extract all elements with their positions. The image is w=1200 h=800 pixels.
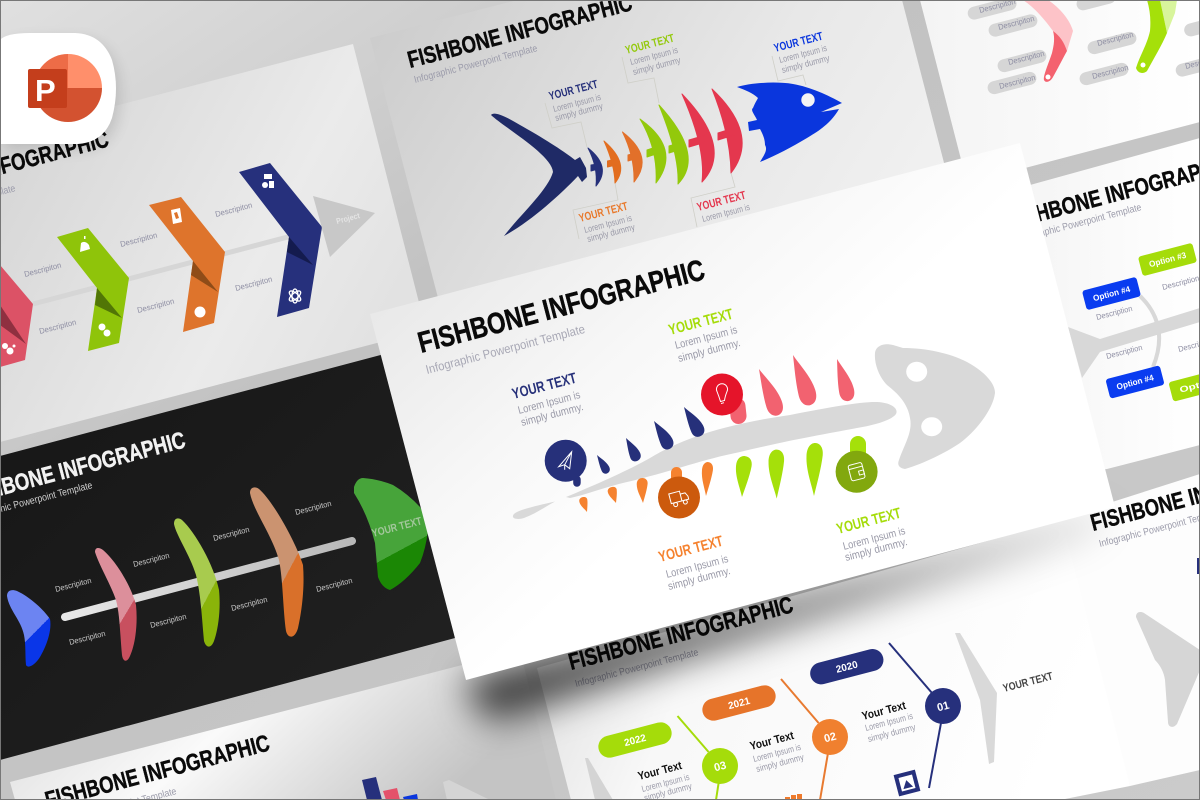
label: orange	[657, 533, 732, 593]
label: green top: simply dummy.	[677, 337, 742, 365]
description labels: Descripiton	[119, 231, 158, 249]
label: green	[624, 33, 682, 77]
label: green bottom: YOUR TEXT	[835, 505, 903, 538]
label: navy: Lorem Ipsum is	[552, 92, 602, 114]
icon: powerpoint badge: P	[35, 73, 56, 108]
text block: 01: simply dummy	[867, 722, 917, 744]
arrow head: project: Project	[335, 211, 361, 226]
label: green: YOUR TEXT	[624, 33, 676, 57]
description labels: Descripiton	[234, 275, 273, 293]
subtitle: Infographic Powerpoint Template	[574, 647, 700, 690]
chevron: green	[57, 228, 129, 351]
pills	[966, 0, 1200, 96]
label: orange: simply dummy	[586, 222, 636, 244]
option: green upper	[1138, 243, 1197, 276]
label: navy: Lorem Ipsum is	[517, 389, 582, 417]
option: green upper: Option #3	[1148, 250, 1187, 269]
fish tail shape	[1136, 612, 1200, 727]
panel: timeline slide	[537, 520, 1130, 800]
ribs: green lower	[733, 436, 866, 499]
panel: dark boomerang slide	[0, 353, 455, 760]
node: 03	[702, 748, 738, 784]
panel: option cards slide	[1005, 138, 1200, 480]
pill labels: Descripiton	[1091, 63, 1129, 81]
bar fragment	[1197, 558, 1200, 574]
description labels: Descripiton	[315, 576, 353, 594]
descriptions: Description	[1095, 304, 1133, 322]
option: blue upper	[1082, 277, 1141, 310]
description labels: Descripiton	[212, 525, 250, 543]
main slide shadow	[462, 507, 1115, 722]
description labels: Descripiton	[230, 595, 268, 613]
boomerang: orange	[250, 487, 304, 637]
option: green lower	[1168, 368, 1200, 402]
ribs: red upper	[729, 352, 856, 425]
label: red	[696, 190, 751, 224]
option: blue lower: Option #4	[1115, 372, 1155, 392]
label: blue: Lorem Ipsum is	[778, 43, 828, 65]
icon: orange fragment	[785, 794, 802, 800]
text block: 03	[637, 760, 693, 800]
icon: powerpoint badge	[0, 33, 120, 150]
label: green bottom: simply dummy.	[844, 536, 909, 564]
label: navy	[548, 79, 604, 123]
year pill: 2020	[808, 647, 886, 687]
node: 01	[925, 688, 961, 724]
label: navy: simply dummy.	[520, 401, 585, 429]
rod	[65, 541, 352, 617]
text block: 03: Your Text	[637, 760, 683, 783]
fish head	[737, 83, 842, 162]
panel: boomerang pills slide	[920, 0, 1200, 175]
label: red: Lorem Ipsum is	[701, 202, 751, 224]
panel: lower right slide	[1040, 452, 1200, 786]
icon: stamp	[894, 770, 920, 796]
option: blue lower	[1105, 365, 1165, 399]
description labels: Descripiton	[54, 576, 92, 594]
text block: 02: simply dummy	[755, 752, 805, 774]
label: orange: Lorem Ipsum is	[665, 553, 730, 581]
boomerang: blue	[7, 590, 50, 667]
label: blue: simply dummy	[780, 53, 831, 75]
chevron: orange	[149, 197, 225, 332]
timeline lines	[678, 643, 941, 800]
pill labels	[978, 0, 1200, 91]
gray tail shape	[955, 633, 997, 764]
chevron: red	[0, 265, 33, 367]
fish skeleton: head	[875, 344, 995, 469]
description labels: Descripiton	[294, 499, 332, 517]
label: your text: YOUR TEXT	[1002, 670, 1054, 695]
ribs: orange lower	[578, 462, 714, 513]
ribs: navy upper	[594, 403, 707, 475]
spine	[33, 228, 322, 304]
text block: 02	[749, 730, 805, 774]
boomerang: pink	[95, 548, 137, 661]
text block: 02: Your Text	[749, 730, 795, 753]
chevron: navy	[239, 163, 322, 317]
year pill: 2022	[596, 720, 674, 760]
pill labels: Descripiton	[1007, 49, 1045, 67]
text block: 01: Your Text	[861, 700, 907, 723]
head: green	[354, 478, 428, 590]
label: green top: YOUR TEXT	[667, 306, 735, 339]
panel: blue fish slide	[370, 0, 1000, 420]
gray fish fragment	[443, 780, 490, 800]
label: navy	[510, 370, 585, 429]
fish tail	[491, 114, 587, 236]
connectors	[545, 56, 806, 239]
description labels: Descripiton	[136, 297, 175, 315]
subtitle: Infographic Powerpoint Template	[1017, 202, 1143, 245]
boomerang: green	[1136, 0, 1177, 73]
text block: 03: Lorem Ipsum is	[640, 772, 691, 794]
node: 02	[812, 719, 848, 755]
fish skeleton: spine	[513, 402, 897, 519]
description labels: Descripiton	[38, 318, 77, 336]
boomerang: lime	[174, 518, 220, 647]
label: orange: simply dummy.	[667, 565, 732, 593]
year pill: 2021	[700, 683, 778, 723]
pill labels: Descripiton	[1096, 30, 1134, 48]
panel: main fishbone slide	[370, 143, 1115, 680]
pill labels: Descripiton	[997, 14, 1035, 32]
label: green: Lorem Ipsum is	[629, 45, 679, 67]
icon: paper plane node	[545, 440, 587, 487]
label: green bottom	[835, 505, 909, 564]
label: navy: YOUR TEXT	[510, 370, 578, 403]
node: 02: 02	[823, 731, 838, 745]
year pill: 2020: 2020	[835, 659, 860, 676]
description labels	[23, 201, 273, 336]
fish ribs	[588, 89, 742, 186]
label: green bottom: Lorem Ipsum is	[842, 525, 907, 553]
head: green: YOUR TEXT	[371, 515, 423, 540]
spine and arc	[1068, 296, 1200, 378]
panel: chevron fishbone slide	[0, 44, 426, 442]
label: green: simply dummy	[632, 55, 682, 77]
description labels: Descripiton	[68, 629, 106, 647]
year pill: 2021: 2021	[727, 696, 752, 712]
icon: light bulb node	[701, 374, 743, 416]
node: 01: 01	[936, 700, 951, 714]
label: navy: simply dummy	[554, 101, 604, 123]
icon: wallet node	[836, 451, 878, 493]
label: blue: YOUR TEXT	[773, 31, 824, 55]
label: orange: YOUR TEXT	[657, 533, 725, 566]
label: orange: YOUR TEXT	[578, 201, 629, 225]
descriptions	[1095, 274, 1200, 361]
boomerang: red	[1023, 0, 1073, 82]
option: blue upper: Option #4	[1092, 284, 1131, 303]
subtitle: Infographic Powerpoint Template	[424, 322, 586, 377]
label: green top	[667, 306, 742, 365]
title: FISHBONE INFOGRAPHIC	[414, 253, 708, 360]
description labels: Descripiton	[132, 551, 170, 569]
subtitle: Infographic Powerpoint Template	[413, 43, 539, 86]
year pill: 2022: 2022	[623, 733, 648, 749]
label: green top: Lorem Ipsum is	[674, 324, 739, 352]
node: 03: 03	[713, 760, 728, 774]
bar chart	[362, 777, 418, 800]
description labels: Descripiton	[149, 612, 187, 630]
label: blue	[773, 31, 831, 75]
description labels: Descripiton	[214, 201, 253, 219]
label: navy: YOUR TEXT	[548, 79, 599, 103]
label: orange	[578, 201, 636, 244]
text block: 02: Lorem Ipsum is	[752, 742, 802, 764]
pill labels: Descripiton	[998, 73, 1036, 91]
label: red: YOUR TEXT	[696, 190, 747, 214]
arrow head: project	[313, 196, 375, 257]
title: FISHBONE INFOGRAPHIC	[566, 591, 796, 675]
label: orange: Lorem Ipsum is	[583, 213, 633, 235]
descriptions: Description	[1105, 343, 1143, 361]
text block: 01: Lorem Ipsum is	[864, 711, 914, 733]
icon: truck node	[658, 476, 700, 518]
text block: 01	[861, 700, 917, 744]
description labels: Descripiton	[23, 261, 62, 279]
panel: bar chart slide	[10, 650, 556, 800]
gray left fin	[585, 758, 613, 800]
description labels	[54, 499, 353, 647]
